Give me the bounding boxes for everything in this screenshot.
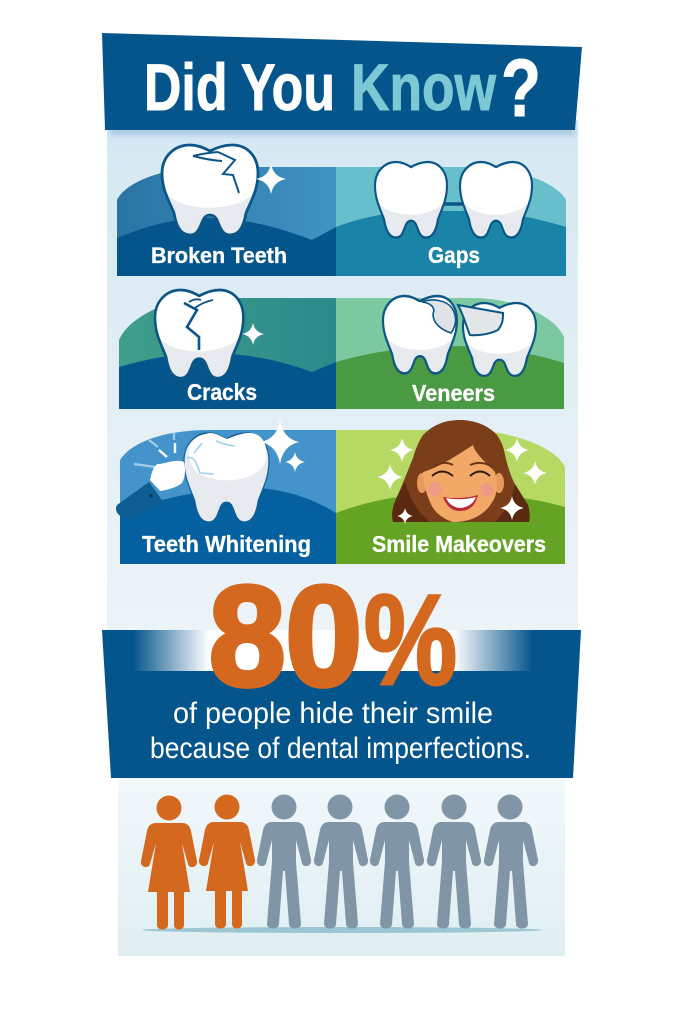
icon: sparkles [261,420,305,472]
label: Broken Teeth: Broken Teeth [151,243,287,268]
icon: sparkle [256,164,286,194]
icon: cracked tooth [155,290,243,378]
icon: whitening tooth [184,433,269,522]
panel: veneers [336,296,564,409]
banner glow strip [133,630,533,671]
title shadow band [110,128,575,135]
title: Did You Know?: ? [501,43,541,134]
title: Did You Know? [144,43,541,134]
icon: person 5 [370,794,424,928]
label: Smile Makeovers: Smile Makeovers [372,531,546,557]
panel: gaps [336,162,566,276]
icon: person 7 [484,794,538,928]
text: stat description: because of dental imperfections. [150,732,531,765]
panel: broken teeth [117,145,336,276]
stat: 80% [209,557,457,716]
stat: 80%: 80 [209,557,362,716]
icon: person 2 highlighted [199,794,255,928]
title: Did You Know?: Know [351,50,497,124]
icon: person 3 [257,794,311,928]
label: Gaps: Gaps [428,242,480,268]
label: Teeth Whitening: Teeth Whitening [142,531,311,557]
icon: hand polishing tooth [116,433,185,518]
panel: people chart [118,778,565,956]
panel: teeth whitening [116,420,336,564]
label: Veneers: Veneers [412,380,495,406]
panel: cracks [119,290,336,409]
icon: smiling woman [392,420,530,522]
text: stat description: of people hide their smile [173,697,493,730]
label: Cracks: Cracks [187,379,257,405]
icon: broken tooth [162,145,258,235]
icon: person 1 highlighted [141,796,197,930]
panel: statistic banner [102,557,581,778]
panel: smile makeovers [336,420,565,564]
icon: person 4 [314,794,368,928]
text: stat description [150,697,531,765]
icon: two teeth with gap [375,162,532,238]
panel: light blue background [107,120,578,640]
icon: teeth with veneers [383,296,536,376]
ground shadow [142,927,542,933]
icon: sparkles [377,438,547,524]
icon: person 6 [427,794,481,928]
icon: sparkle [242,323,264,345]
title: Did You Know?: Did You [144,50,335,124]
title banner [102,33,582,134]
stat: 80%: % [364,569,457,712]
